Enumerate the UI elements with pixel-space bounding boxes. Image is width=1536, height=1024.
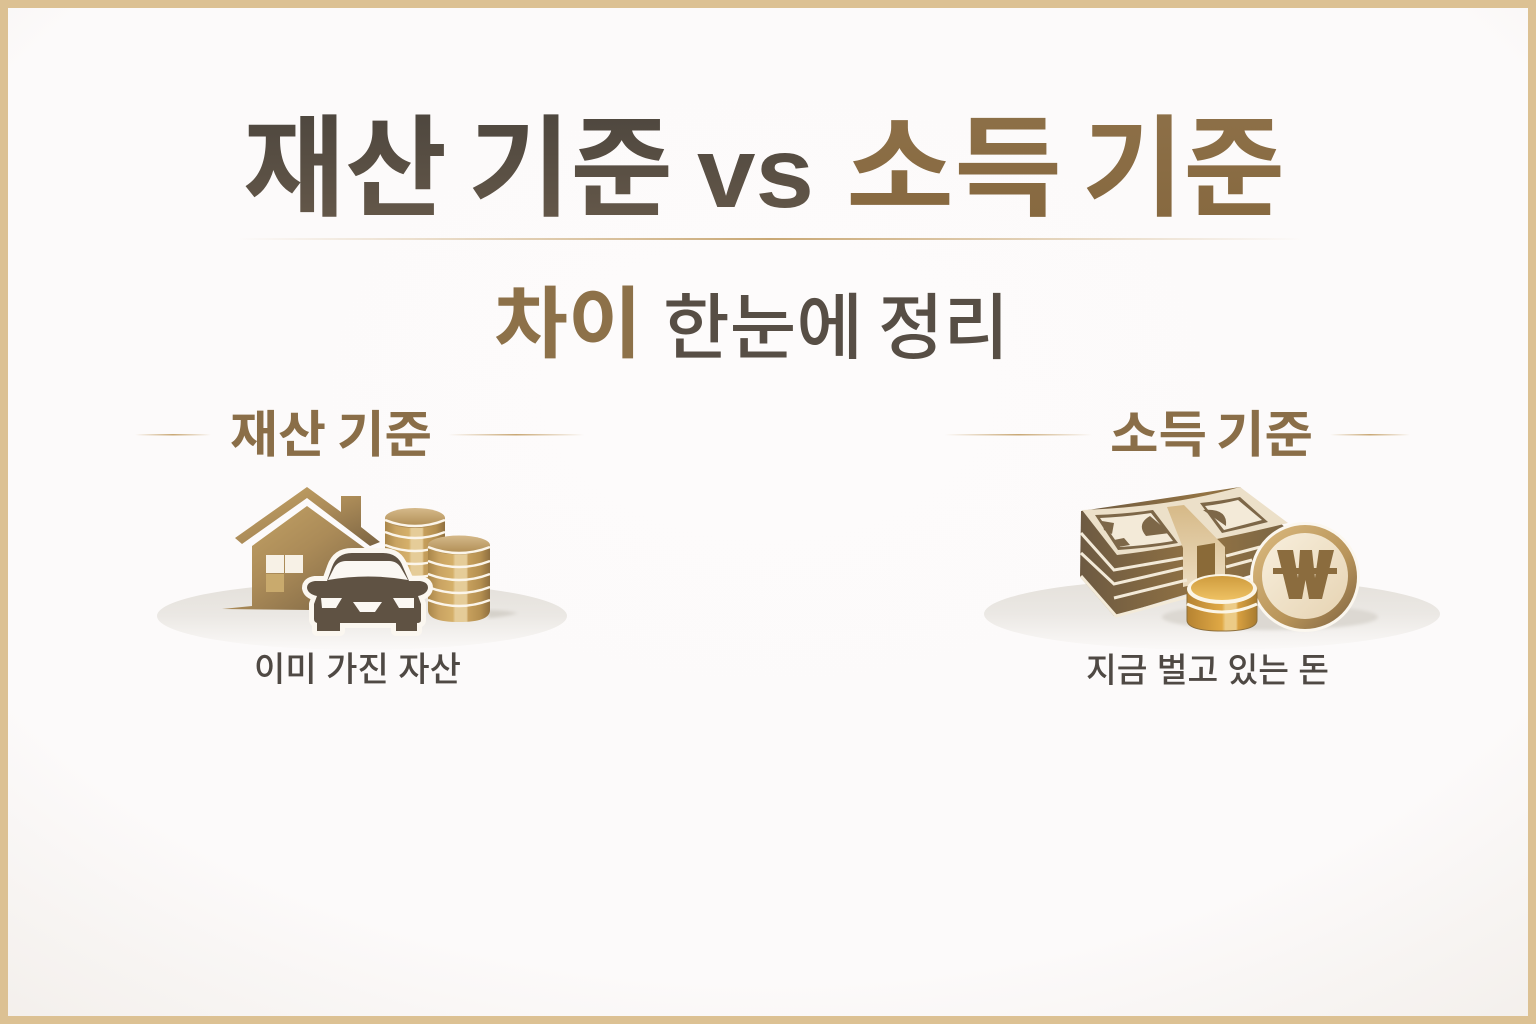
- ground shadow: [157, 582, 567, 650]
- subtitle: difference: 차이: [494, 280, 642, 368]
- right note panel: [1200, 497, 1268, 533]
- subtitle: at a glance: 한눈에: [663, 289, 863, 369]
- panel heading: property standard: 기준: [337, 407, 432, 463]
- panel heading: income standard: [1110, 407, 1313, 463]
- icon: gold coin stack: [1187, 574, 1257, 631]
- icon: front coin stack: [428, 536, 490, 622]
- money band: [1167, 505, 1225, 587]
- title: [243, 108, 1285, 231]
- panel heading: property standard: 재산: [230, 407, 326, 463]
- title: property standard: [243, 108, 673, 231]
- panel heading: income standard: 소득: [1110, 407, 1207, 463]
- title: income standard: 기준: [1082, 108, 1285, 231]
- icon: banknote stack: [1080, 487, 1288, 616]
- panel: property standard: [135, 407, 584, 689]
- subtitle: at a glance: 정리: [878, 289, 1009, 369]
- caption: assets already owned: 이미 가진 자산: [254, 651, 461, 689]
- icon: back coin stack: [385, 508, 445, 590]
- title: property standard: 기준: [468, 108, 673, 231]
- panel heading: property standard: [230, 407, 432, 463]
- title: income standard: 소득: [846, 108, 1062, 231]
- caption: money being earned now: 지금 벌고 있는 돈: [1086, 652, 1329, 690]
- panel: income standard: [945, 407, 1440, 690]
- title: property standard: 재산: [243, 108, 447, 231]
- subtitle: at a glance: [663, 289, 1009, 369]
- won symbol: [1273, 550, 1337, 599]
- icon: car: [307, 553, 428, 631]
- icon: won coin: [1250, 522, 1360, 632]
- panel heading: income standard: 기준: [1216, 407, 1313, 463]
- subtitle: [494, 280, 1009, 369]
- title: income standard: [846, 108, 1285, 231]
- ground shadow: [984, 578, 1440, 650]
- icon: house: [222, 487, 380, 610]
- title: vs: vs: [697, 117, 814, 229]
- left note panel: [1095, 510, 1178, 550]
